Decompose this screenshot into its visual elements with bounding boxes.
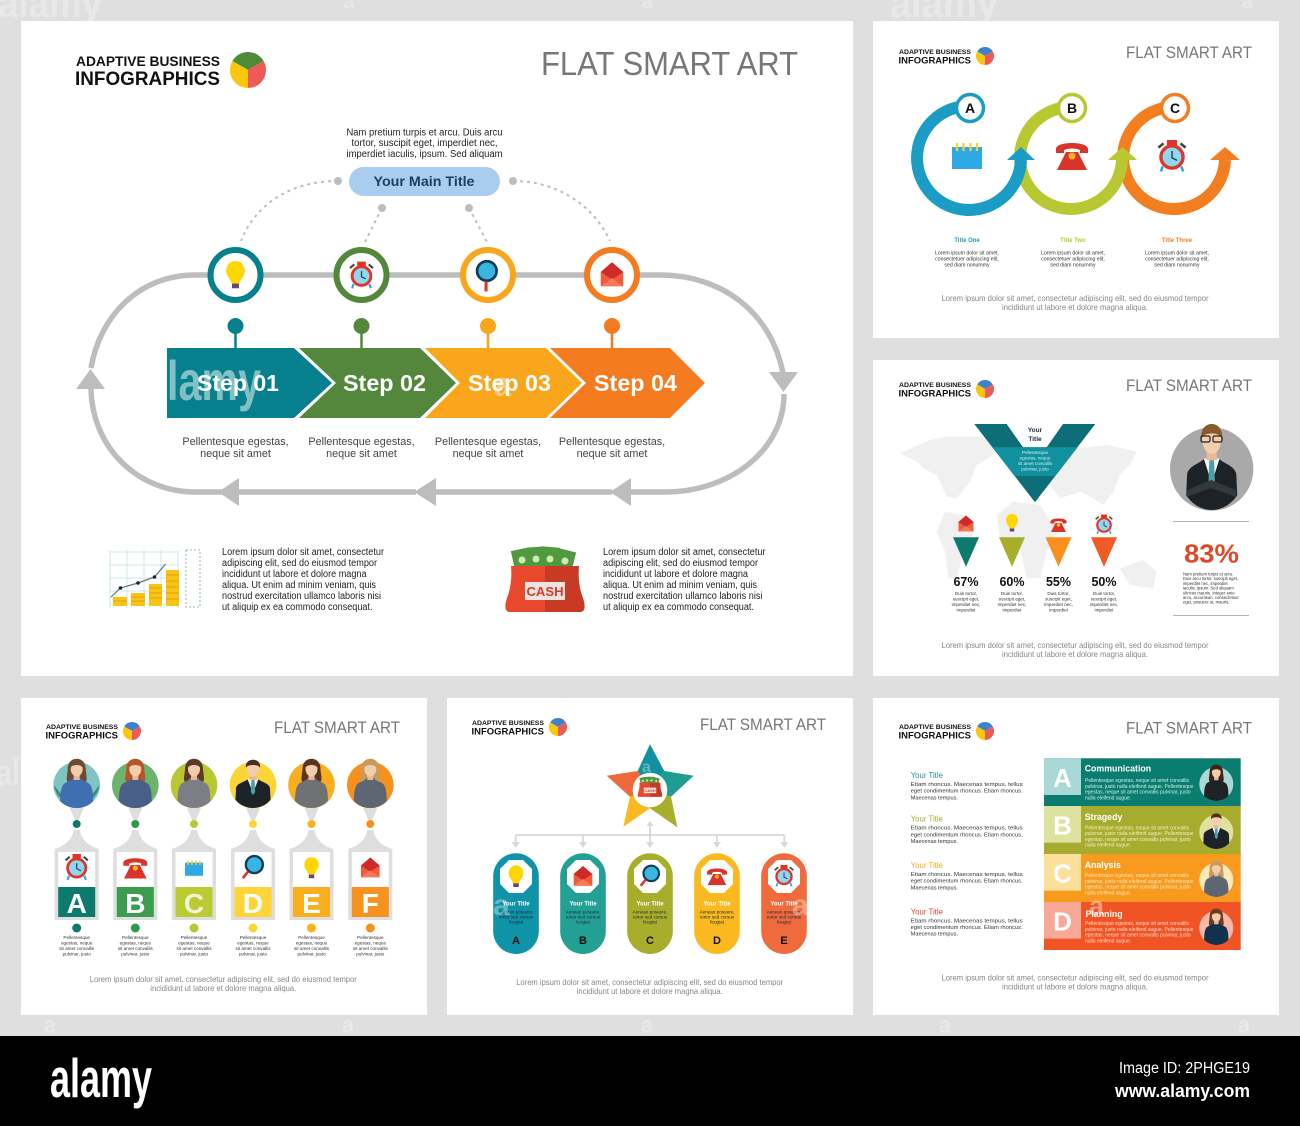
- step chevron 3: Step 03: [468, 370, 551, 396]
- card B: sit amet convallis: [118, 946, 153, 951]
- pill B: tortor sed cursus: [566, 914, 601, 920]
- left note 3: Etiam rhoncus. Maecenas tempus, tellus: [911, 872, 1023, 878]
- pill B: Your Title: [569, 902, 597, 908]
- pill C: tortor sed cursus: [633, 914, 668, 920]
- card C: pulvinar, justo: [180, 952, 208, 956]
- title: main: FLAT SMART ART: [541, 45, 798, 82]
- left note 3: Your Title: [911, 861, 943, 870]
- item 55%: imperdiet nec,: [1044, 602, 1073, 607]
- image id: Image ID: 2PHGE19: [1119, 1060, 1250, 1077]
- left note 1: [911, 771, 1023, 801]
- divider top: [1173, 521, 1249, 522]
- icon ring 2: clock: [336, 250, 386, 300]
- badge B: B: [1067, 100, 1077, 116]
- left note 4: [911, 907, 1023, 938]
- card E: pulvinar, justo: [297, 952, 326, 956]
- step chevron 4: Step 04: [594, 370, 677, 396]
- text block: right note: incididunt ut labore et dolore magna: [603, 569, 748, 580]
- item 50%: suscipit eget,: [1091, 596, 1117, 602]
- item 67%: Duis tortor,: [955, 591, 977, 596]
- row A: Communication: [1085, 764, 1151, 774]
- text block: right note: adipiscing elit, sed do eiusmod tempor: [603, 558, 759, 569]
- title: FLAT SMART ART: [1126, 44, 1252, 62]
- column text C: Title Three: [1162, 238, 1193, 244]
- left note 2: [911, 814, 1023, 845]
- stat description: Nam pretium turpis et arcu.: [1183, 572, 1234, 576]
- stat description: iaculis, ipsum. Sed aliquam: [1183, 586, 1234, 591]
- logo: INFOGRAPHICS: [46, 730, 118, 742]
- text block: left note: incididunt ut labore et dolore magna: [222, 569, 367, 580]
- row B: nulla eleifend augue.: [1085, 843, 1131, 849]
- icon: cash bag: [505, 546, 585, 612]
- stat description: [1183, 572, 1239, 605]
- left note 1: eget condimentum rhoncus. Etiam rhoncus.: [911, 789, 1023, 795]
- card D: D: [243, 888, 263, 919]
- pill D: feugiat: [710, 920, 725, 924]
- badge C: C: [1170, 100, 1180, 116]
- star: CASH: [644, 788, 656, 793]
- pill E: tortor sed cursus: [767, 914, 802, 920]
- logo: ADAPTIVE BUSINESS: [899, 724, 972, 731]
- left note 1: Etiam rhoncus. Maecenas tempus, tellus: [911, 782, 1023, 788]
- column text B: sed diam nonummy: [1050, 262, 1096, 268]
- text block: right note: ut aliquip ex ea commodo consequat.: [603, 602, 754, 613]
- step chevron 3: [425, 348, 582, 418]
- pill C: [627, 853, 673, 954]
- row D: pulvinar, justo nulla eleifend augue. Pellentesque: [1085, 927, 1194, 933]
- panel: three arrows: [873, 21, 1279, 338]
- row C: Pellentesque egestas, neque sit amet convallis: [1085, 873, 1189, 879]
- column text A: consectetuer adipiscing elit,: [935, 256, 999, 262]
- column text C: sed diam nonummy: [1154, 262, 1200, 268]
- step chevron 2: Step 02: [343, 370, 426, 396]
- big V shape: egestas, neque: [1020, 456, 1051, 460]
- title: FLAT SMART ART: [274, 719, 400, 737]
- stat description: ultrices mauris. Integer ante: [1183, 590, 1235, 595]
- icon: calendar: [952, 143, 982, 169]
- item 50%: imperdiet: [1095, 608, 1114, 612]
- item 50%: imperdiet nec,: [1090, 602, 1118, 607]
- item 55%: 55%: [1046, 575, 1071, 589]
- big V shape: Your: [1028, 427, 1043, 434]
- watermarks: top edge: [0, 0, 1254, 793]
- column text A: Lorem ipsum dolor sit amet,: [935, 250, 999, 256]
- row B: [1044, 806, 1241, 854]
- footer text: [942, 640, 1209, 659]
- panel: six people cards: [21, 698, 427, 1015]
- step chevron 3: a: [494, 366, 512, 404]
- step captions: Pellentesque egestas,: [435, 436, 541, 448]
- card B: [112, 759, 159, 956]
- big V shape: Pellentesque: [1022, 450, 1049, 455]
- text block: intro above main title: [346, 128, 502, 160]
- row D: a: [1089, 891, 1105, 921]
- footer band: [0, 1036, 1300, 1126]
- pill B: Aenean posuere,: [566, 910, 600, 914]
- card E: Pellentesque: [298, 935, 325, 940]
- badge C: [1162, 94, 1188, 122]
- row C: C: [1053, 858, 1072, 888]
- arrow A: [917, 106, 1035, 210]
- item 50%: Duis tortor,: [1093, 591, 1115, 596]
- footer text: Lorem ipsum dolor sit amet, consectetur adipiscing elit, sed do eiusmod tempor: [942, 640, 1209, 650]
- row A: pulvinar, justo nulla eleifend augue. Pellentesque: [1085, 784, 1194, 790]
- connectors: [512, 821, 788, 848]
- item 50%: 50%: [1091, 575, 1117, 589]
- watermarks: lower edge: a: [44, 1012, 57, 1039]
- row B: egestas, neque sit amet convallis pulvinar, justo: [1085, 837, 1191, 843]
- row B: Stragedy: [1085, 812, 1122, 822]
- arrow B: [1020, 107, 1137, 209]
- icon ring 1: bulb: [210, 250, 260, 300]
- left note 3: eget condimentum rhoncus. Etiam rhoncus.: [911, 879, 1023, 885]
- item 67%: suscipit eget,: [953, 596, 979, 602]
- watermarks: lower edge: a: [939, 1012, 952, 1039]
- pill E: [761, 853, 809, 954]
- icon: cash bag: CASH: [526, 584, 564, 599]
- watermarks: lower edge: a: [342, 1012, 355, 1039]
- card E: egestas, neque: [296, 940, 328, 946]
- step captions: Pellentesque egestas,: [308, 436, 415, 448]
- step chevron 4: [550, 348, 705, 418]
- divider bottom: [1173, 615, 1249, 616]
- badge B: [1058, 94, 1086, 122]
- column text A: Title One: [954, 238, 980, 244]
- item 67%: 67%: [953, 575, 979, 589]
- step captions: neque sit amet: [200, 448, 271, 460]
- row B: B: [1053, 810, 1072, 840]
- card E: sit amet convallis: [294, 946, 330, 951]
- card D: pulvinar, justo: [239, 952, 267, 956]
- column text B: [1041, 238, 1105, 268]
- footer text: Lorem ipsum dolor sit amet, consectetur adipiscing elit, sed do eiusmod tempor: [942, 293, 1209, 303]
- card A: [53, 759, 100, 956]
- icon: clock: [1158, 140, 1186, 171]
- step chevron 1: lamy: [167, 349, 261, 412]
- left note 4: eget condimentum rhoncus. Etiam rhoncus.: [911, 925, 1023, 931]
- pill C: feugiat: [643, 920, 658, 924]
- panel: world map percentages: [873, 360, 1279, 676]
- card A: pulvinar, justo: [63, 952, 91, 956]
- row C: [1044, 854, 1241, 902]
- pill B: feugiat: [576, 920, 591, 924]
- row D: D: [1053, 906, 1072, 936]
- row A: egestas, neque sit amet convallis pulvinar, justo: [1085, 790, 1191, 796]
- step chevron 1: [167, 348, 332, 418]
- logo: ADAPTIVE BUSINESS: [899, 49, 972, 56]
- title: FLAT SMART ART: [1126, 377, 1252, 395]
- pill D: tortor sed cursus: [700, 914, 735, 920]
- footer text: Lorem ipsum dolor sit amet, consectetur adipiscing elit, sed do eiusmod tempor: [942, 972, 1209, 982]
- logo: ADAPTIVE BUSINESS: [46, 724, 119, 731]
- logo: [472, 718, 567, 738]
- badge A: [956, 94, 984, 122]
- row D: Planning: [1086, 909, 1123, 919]
- pill B: B: [579, 935, 587, 947]
- step captions: [182, 436, 665, 460]
- left note 4: Your Title: [911, 907, 943, 916]
- left note 1: Your Title: [911, 771, 943, 780]
- pill D: Aenean posuere,: [700, 910, 734, 914]
- column text C: Lorem ipsum dolor sit amet,: [1145, 250, 1209, 256]
- stat description: eget, posuere ut, mauris.: [1183, 600, 1229, 605]
- icon ring 3: magnifier: [463, 250, 513, 300]
- connector dots: [334, 177, 517, 212]
- pill E: feugiat: [777, 920, 792, 924]
- column text B: Lorem ipsum dolor sit amet,: [1041, 250, 1105, 256]
- item 67%: imperdiet: [957, 608, 976, 612]
- logo: ADAPTIVE BUSINESS: [899, 382, 972, 389]
- item 60%: [998, 514, 1026, 612]
- logo: main: INFOGRAPHICS: [75, 69, 220, 90]
- card F: pulvinar, justo: [356, 952, 385, 956]
- item 60%: imperdiet: [1003, 608, 1022, 612]
- footer text: [516, 977, 783, 996]
- card D: [230, 760, 276, 956]
- row C: nulla eleifend augue.: [1085, 890, 1131, 896]
- logo: INFOGRAPHICS: [472, 726, 544, 738]
- row B: Pellentesque egestas, neque sit amet convallis: [1085, 825, 1189, 831]
- card A: egestas, neque: [61, 940, 93, 946]
- card D: egestas, neque: [237, 940, 269, 946]
- pill E: Aenean posuere,: [766, 910, 802, 914]
- pill D: [694, 853, 740, 954]
- text block: left note: ut aliquip ex ea commodo consequat.: [222, 602, 372, 613]
- card B: egestas, neque: [120, 940, 151, 946]
- pill B: [560, 853, 606, 954]
- panel: star hierarchy: [447, 698, 853, 1015]
- pill A: a: [493, 889, 510, 922]
- item 55%: [1044, 518, 1073, 612]
- step captions: neque sit amet: [577, 448, 647, 460]
- stat description: Duis arcu tortor, suscipit eget,: [1183, 576, 1238, 581]
- item 60%: Duis tortor,: [1001, 591, 1023, 596]
- left note 2: Your Title: [911, 814, 943, 824]
- arrow C: [1123, 107, 1240, 209]
- item 55%: Duis tortor,: [1047, 591, 1070, 596]
- row D: nulla eleifend augue.: [1085, 938, 1131, 944]
- text block: right note: nostrud exercitation ullamco laboris nisi: [603, 591, 762, 602]
- pill A: Your Title: [502, 902, 530, 908]
- card C: C: [184, 888, 204, 919]
- card F: sit amet convallis: [353, 946, 388, 951]
- footer text: Lorem ipsum dolor sit amet, consectetur adipiscing elit, sed do eiusmod tempor: [516, 977, 783, 987]
- footer text: incididunt ut labore et dolore magna aliqua.: [150, 983, 296, 993]
- pill A: feugiat: [509, 920, 524, 924]
- column text C: consectetuer adipiscing elit,: [1145, 256, 1209, 262]
- card C: Pellentesque: [181, 935, 208, 940]
- column text B: Title Two: [1060, 238, 1086, 244]
- watermarks: lower edge: a: [1238, 1012, 1251, 1039]
- footer text: incididunt ut labore et dolore magna aliqua.: [1002, 649, 1148, 659]
- left note 2: Etiam rhoncus. Maecenas tempus, tellus: [911, 826, 1023, 832]
- panel: main step cycle: [21, 21, 853, 676]
- pill C: Your Title: [636, 902, 664, 908]
- row C: Analysis: [1085, 860, 1121, 870]
- stat description: imperdiet nec, imperdiet: [1183, 581, 1229, 586]
- left note 4: Etiam rhoncus. Maecenas tempus, tellus: [911, 918, 1023, 924]
- footer text: incididunt ut labore et dolore magna aliqua.: [577, 986, 723, 996]
- card F: F: [362, 888, 379, 919]
- item 50%: [1090, 515, 1118, 612]
- pill: main title: Your Main Title: [374, 173, 475, 189]
- text block: right note: Lorem ipsum dolor sit amet, consectetur: [603, 547, 766, 558]
- stat: 83%: 83%: [1184, 538, 1239, 568]
- watermarks: lower edge: a: [641, 1012, 654, 1039]
- card D: Pellentesque: [240, 935, 267, 940]
- footer text: Lorem ipsum dolor sit amet, consectetur adipiscing elit, sed do eiusmod tempor: [90, 974, 357, 984]
- logo: ADAPTIVE BUSINESS: [472, 720, 545, 727]
- card C: sit amet convallis: [177, 946, 212, 951]
- card D: sit amet convallis: [236, 946, 271, 951]
- card F: egestas, neque: [355, 940, 386, 946]
- card A: sit amet convallis: [59, 946, 95, 951]
- left note 3: Maecenas tempus.: [911, 885, 958, 891]
- pill A: [493, 853, 539, 954]
- item 55%: suscipit eget,: [1045, 596, 1072, 602]
- row D: [1044, 891, 1241, 950]
- portrait: businessman: [1170, 424, 1253, 512]
- card F: Pellentesque: [357, 935, 384, 940]
- text block: left note: Lorem ipsum dolor sit amet, consectetur: [222, 547, 385, 558]
- step captions: Pellentesque egestas,: [559, 436, 665, 448]
- url: www.alamy.com: [1114, 1081, 1250, 1101]
- step chevron 1: Step 01: [197, 370, 279, 396]
- stat description: arcu, accumsan, consectetuer: [1183, 595, 1239, 600]
- pill A: tortor sed cursus: [499, 914, 534, 920]
- star: a: [642, 759, 651, 776]
- card C: [171, 759, 217, 956]
- text block: intro above main title: Nam pretium turpis et arcu. Duis arcu: [346, 128, 502, 138]
- pill A: A: [512, 935, 520, 947]
- logo: main: [75, 52, 266, 90]
- card E: E: [302, 888, 321, 919]
- big V shape: sit amet convallis: [1018, 461, 1053, 466]
- card B: B: [125, 888, 145, 919]
- left note 2: Maecenas tempus.: [911, 839, 958, 845]
- text block: left note: adipiscing elit, sed do eiusmod tempor: [222, 558, 378, 569]
- card B: pulvinar, justo: [121, 952, 150, 956]
- row B: pulvinar, justo nulla eleifend augue. Pellentesque: [1085, 831, 1194, 837]
- left note 3: [911, 861, 1023, 891]
- row A: [1044, 758, 1241, 806]
- text block: left note: aliqua. Ut enim ad minim veniam, quis: [222, 580, 376, 591]
- track arrows: [76, 369, 798, 506]
- card C: egestas, neque: [178, 940, 210, 946]
- cycle track: [91, 275, 784, 492]
- step chevron 2: [299, 348, 456, 418]
- footer text: [942, 972, 1209, 992]
- text block: intro above main title: tortor, suscipit eget, imperdiet nec,: [352, 138, 498, 149]
- text block: right note: [603, 547, 766, 613]
- text block: right note: aliqua. Ut enim ad minim veniam, quis: [603, 580, 757, 591]
- big V shape: [974, 424, 1095, 502]
- logo: INFOGRAPHICS: [898, 730, 971, 742]
- big V shape: pulvinar, justo: [1021, 466, 1049, 472]
- pill E: E: [780, 935, 788, 947]
- left note 2: eget condimentum rhoncus. Etiam rhoncus.: [911, 832, 1023, 838]
- star: [607, 744, 694, 827]
- logo: [898, 47, 994, 66]
- pill C: C: [646, 935, 654, 947]
- brand: alamy: alamy: [50, 1047, 152, 1109]
- icon: coin chart: [110, 550, 200, 608]
- pill E: a: [792, 889, 809, 922]
- text block: left note: nostrud exercitation ullamco laboris nisi: [222, 591, 381, 602]
- item 67%: [952, 516, 980, 612]
- pins: [228, 318, 620, 348]
- row C: pulvinar, justo nulla eleifend augue. Pellentesque: [1085, 879, 1194, 885]
- pill E: Your Title: [770, 902, 798, 908]
- column text A: [935, 238, 999, 268]
- column text A: sed diam nonummy: [944, 262, 990, 268]
- logo: [46, 722, 141, 742]
- step captions: neque sit amet: [326, 448, 397, 460]
- row D: Pellentesque egestas, neque sit amet convallis: [1085, 921, 1189, 927]
- pill D: Your Title: [703, 902, 731, 908]
- logo: [898, 722, 994, 742]
- step captions: Pellentesque egestas,: [182, 436, 289, 448]
- pill A: Aenean posuere,: [498, 910, 534, 914]
- footer text: [90, 974, 357, 993]
- row A: A: [1053, 763, 1072, 793]
- card A: A: [67, 888, 87, 919]
- badge A: A: [965, 100, 975, 116]
- footer text: [942, 293, 1209, 312]
- item 67%: imperdiet nec,: [952, 602, 980, 607]
- card F: [347, 759, 394, 956]
- step captions: neque sit amet: [453, 448, 523, 460]
- column text C: [1145, 238, 1209, 268]
- pill D: D: [713, 935, 721, 947]
- left note 1: Maecenas tempus.: [911, 795, 958, 801]
- world map: [900, 437, 1157, 588]
- logo: INFOGRAPHICS: [898, 388, 971, 400]
- item 60%: imperdiet nec,: [998, 602, 1026, 607]
- title: FLAT SMART ART: [700, 716, 826, 734]
- item 60%: 60%: [999, 575, 1025, 589]
- pill C: Aenean posuere,: [632, 910, 668, 914]
- panel: letter rows: [873, 698, 1279, 1015]
- left note 4: Maecenas tempus.: [911, 932, 958, 938]
- dashed connectors: [241, 181, 610, 242]
- pill: main title: [349, 167, 500, 196]
- title: FLAT SMART ART: [1126, 720, 1252, 738]
- row A: Pellentesque egestas, neque sit amet convallis: [1085, 778, 1189, 784]
- row C: egestas, neque sit amet convallis pulvinar, justo: [1085, 885, 1191, 891]
- logo: INFOGRAPHICS: [898, 56, 971, 66]
- item 60%: suscipit eget,: [999, 596, 1025, 602]
- logo: main: ADAPTIVE BUSINESS: [76, 54, 220, 69]
- icon: phone: [1056, 143, 1088, 170]
- card A: Pellentesque: [63, 935, 90, 940]
- watermarks: lower edge: [44, 1012, 1251, 1039]
- row D: egestas, neque sit amet convallis pulvinar, justo: [1085, 933, 1191, 939]
- icon ring 4: envelope: [587, 250, 637, 300]
- logo: [898, 380, 994, 400]
- card B: Pellentesque: [122, 935, 149, 940]
- card E: [288, 759, 335, 956]
- big V shape: Title: [1028, 436, 1042, 443]
- text block: intro above main title: imperdiet iaculis, ipsum. Sed aliquam: [346, 149, 502, 160]
- text block: left note: [222, 547, 385, 613]
- footer text: incididunt ut labore et dolore magna aliqua.: [1002, 982, 1148, 992]
- item 55%: imperdiet: [1049, 608, 1069, 612]
- footer text: incididunt ut labore et dolore magna aliqua.: [1002, 302, 1148, 312]
- row A: nulla eleifend augue.: [1085, 795, 1131, 801]
- column text B: consectetuer adipiscing elit,: [1041, 256, 1105, 262]
